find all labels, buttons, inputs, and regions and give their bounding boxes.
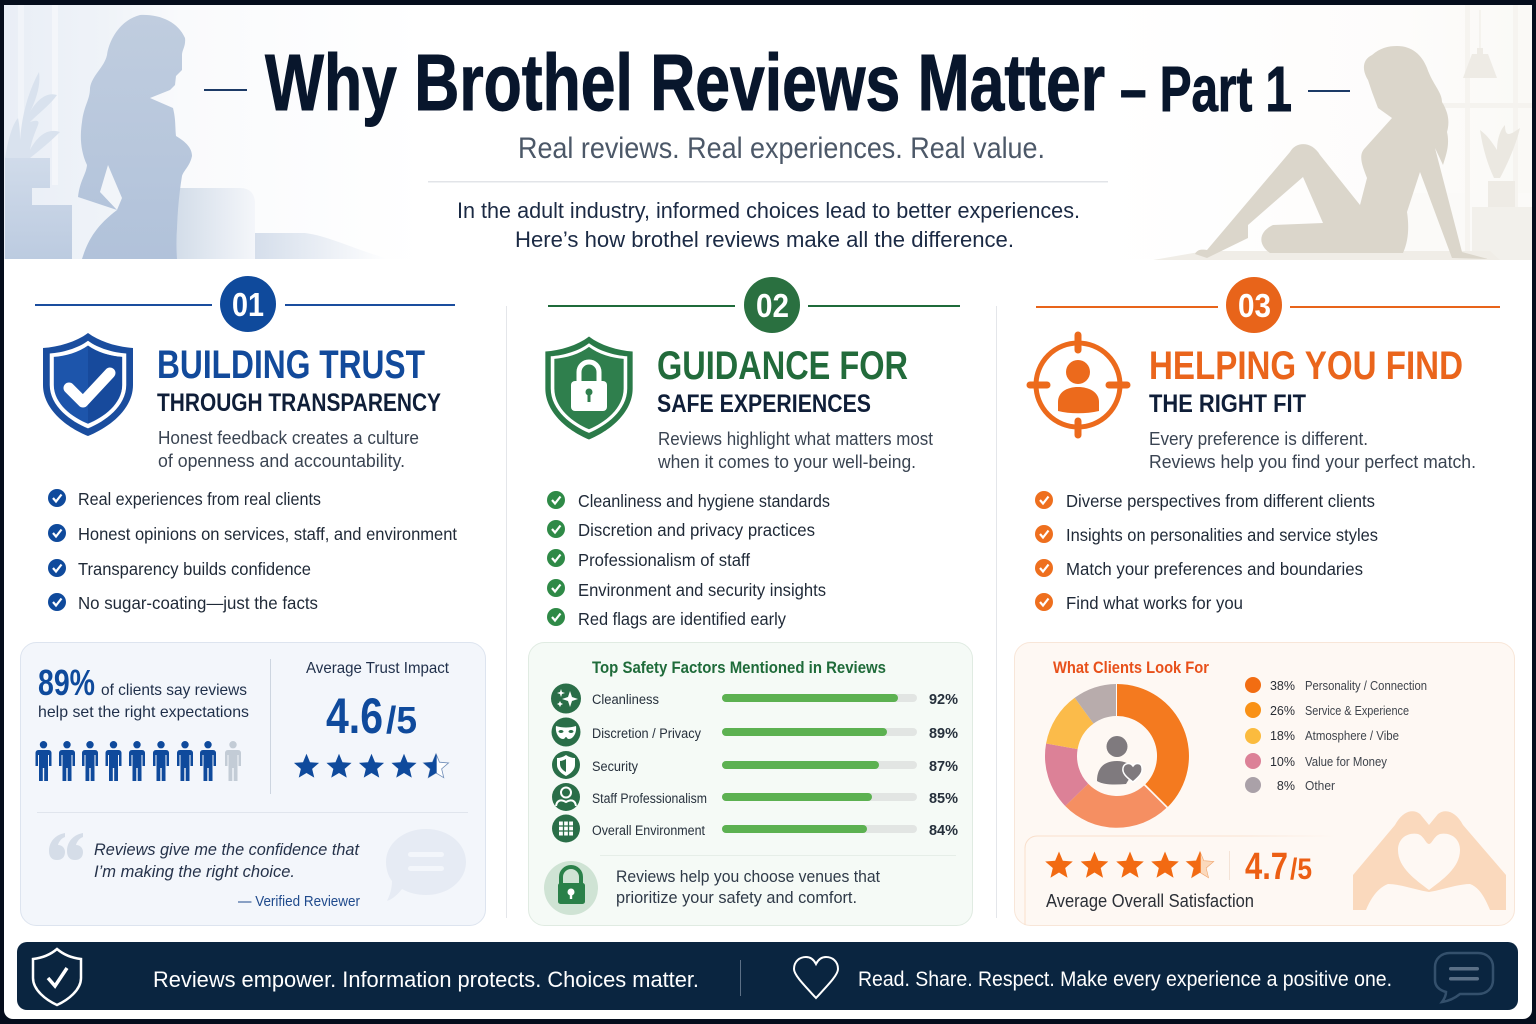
bullet list: Diverse perspectives from different clients — [1066, 491, 1375, 511]
description: Honest feedback creates a culture — [158, 428, 419, 448]
stat: average trust impact — [306, 660, 450, 744]
number badge 03 — [1226, 277, 1282, 333]
rating stars — [294, 754, 449, 778]
panel: what clients look for — [1014, 642, 1514, 926]
intro text: In the adult industry, informed choices lead to better experiences. — [457, 198, 1080, 223]
column separators — [506, 306, 507, 918]
number badge 01: 01 — [232, 286, 264, 323]
left room decor — [5, 5, 390, 259]
testimonial: Reviews give me the confidence that — [94, 840, 360, 859]
intro text: Here’s how brothel reviews make all the difference. — [515, 227, 1014, 252]
icon: shield with lock — [545, 336, 633, 440]
icon: speech bubble — [386, 829, 466, 901]
stat: 89 percent: of clients say reviews — [101, 682, 247, 699]
row: security — [552, 751, 958, 779]
icon: chat bubble outline — [1435, 953, 1493, 1002]
number badge 02: 02 — [756, 287, 789, 324]
bullet list: No sugar-coating—just the facts — [78, 593, 318, 613]
title part label: – Part 1 — [1120, 53, 1292, 125]
attribution: — Verified Reviewer — [238, 894, 360, 910]
right room decor — [1153, 5, 1532, 260]
section 02: guidance — [545, 277, 960, 629]
section 03: right fit — [1030, 277, 1500, 613]
legend: Other — [1305, 779, 1335, 793]
row: staff professionalism: Staff Professionalism — [592, 791, 707, 806]
testimonial — [94, 840, 360, 881]
description — [1149, 429, 1476, 472]
subheading: THE RIGHT FIT — [1149, 390, 1306, 418]
row: security: Security — [592, 759, 638, 774]
bottom banner — [17, 942, 1518, 1010]
header banner — [4, 5, 1532, 260]
legend: 8% — [1277, 779, 1295, 793]
row: overall environment: 84% — [929, 823, 958, 839]
legend: Service & Experience — [1305, 704, 1409, 718]
panel: trust stats — [20, 642, 486, 926]
heading: GUIDANCE FOR — [657, 344, 908, 388]
title rule right — [1308, 90, 1350, 92]
intro text — [457, 198, 1080, 252]
description: Every preference is different. — [1149, 429, 1368, 449]
legend: Value for Money — [1305, 755, 1388, 769]
stat: 89 percent — [38, 662, 249, 721]
stat: average trust impact: /5 — [386, 700, 417, 742]
row: cleanliness: 92% — [929, 692, 958, 708]
row: cleanliness: Cleanliness — [592, 692, 659, 707]
stat: 89 percent: 89% — [38, 662, 95, 703]
number badge 01 — [220, 276, 276, 332]
safety note: Reviews help you choose venues that — [616, 868, 880, 886]
icon: heart hands — [1353, 811, 1506, 910]
bullet list — [1035, 491, 1378, 613]
heading: BUILDING TRUST — [157, 343, 425, 387]
bullet list: Transparency builds confidence — [78, 559, 311, 579]
bullet list: Insights on personalities and service styles — [1066, 525, 1378, 545]
subtitle: Real reviews. Real experiences. Real value. — [518, 132, 1045, 165]
legend: 10% — [1270, 755, 1295, 769]
subheading: SAFE EXPERIENCES — [657, 390, 871, 418]
safety note: prioritize your safety and comfort. — [616, 889, 857, 907]
bullet list: Environment and security insights — [578, 580, 826, 600]
stat: average trust impact: 4.6 — [326, 688, 383, 744]
testimonial: I’m making the right choice. — [94, 862, 295, 881]
bullet list: Find what works for you — [1066, 593, 1243, 613]
donut chart — [1045, 684, 1189, 828]
panel: safety factors — [528, 642, 972, 926]
score: /5 — [1290, 853, 1312, 886]
number badge 03: 03 — [1238, 287, 1271, 324]
bullet list — [48, 489, 457, 613]
legend: 18% — [1270, 729, 1295, 743]
chart title: Top Safety Factors Mentioned in Reviews — [592, 659, 886, 677]
sub-panel: satisfaction rating — [1025, 836, 1335, 925]
row: security: 87% — [929, 759, 958, 775]
icon: heart outline — [794, 957, 838, 998]
bullet list: Red flags are identified early — [578, 609, 786, 629]
icon: person with heart — [1097, 736, 1142, 785]
bullet list — [547, 491, 830, 629]
bullet list: Discretion and privacy practices — [578, 520, 815, 540]
description: Reviews help you find your perfect match. — [1149, 452, 1476, 472]
right figure silhouette — [1195, 46, 1488, 259]
heading: HELPING YOU FIND — [1149, 344, 1463, 388]
title rule left — [204, 89, 247, 91]
row: overall environment: Overall Environment — [592, 823, 705, 838]
description: Reviews highlight what matters most — [658, 429, 933, 449]
score label: Average Overall Satisfaction — [1046, 891, 1254, 911]
safety note — [616, 868, 880, 907]
section 01: building trust — [35, 276, 457, 613]
bullet list: Professionalism of staff — [578, 550, 750, 570]
row: discretion: 89% — [929, 726, 958, 742]
icon row: people 8 of 9 — [36, 741, 241, 781]
bullet list: Honest opinions on services, staff, and environment — [78, 524, 457, 544]
header divider — [428, 181, 1108, 182]
title: Why Brothel Reviews Matter — [265, 38, 1105, 127]
description — [657, 429, 933, 472]
bullet list: Cleanliness and hygiene standards — [578, 491, 830, 511]
banner message left: Reviews empower. Information protects. Choices matter. — [153, 967, 699, 992]
row: discretion: Discretion / Privacy — [592, 726, 701, 741]
stat: 89 percent: help set the right expectations — [38, 704, 249, 721]
row: cleanliness — [551, 684, 958, 714]
legend: 26% — [1270, 704, 1295, 718]
icon: shield check outline — [33, 949, 81, 1005]
subheading: THROUGH TRANSPARENCY — [157, 389, 441, 417]
description — [158, 428, 419, 471]
row: staff professionalism — [552, 783, 958, 811]
description: when it comes to your well-being. — [657, 452, 916, 472]
stat: average trust impact: Average Trust Impact — [306, 660, 450, 677]
row: staff professionalism: 85% — [929, 791, 958, 807]
row: overall environment — [552, 814, 958, 842]
quote mark — [49, 833, 83, 860]
row: discretion — [552, 718, 958, 746]
legend — [1245, 677, 1427, 793]
legend: Atmosphere / Vibe — [1305, 729, 1399, 743]
description: of openness and accountability. — [158, 451, 405, 471]
legend: Personality / Connection — [1305, 679, 1427, 693]
number badge 02 — [744, 277, 800, 333]
bullet list: Match your preferences and boundaries — [1066, 559, 1363, 579]
banner message right: Read. Share. Respect. Make every experience a positive one. — [858, 968, 1392, 991]
left figure silhouette — [78, 15, 192, 259]
rating stars — [1045, 852, 1214, 878]
score: 4.7 — [1245, 846, 1288, 888]
bullet list: Real experiences from real clients — [78, 489, 321, 509]
icon: target with person — [1030, 335, 1127, 435]
legend: 38% — [1270, 679, 1295, 693]
icon: lock — [544, 861, 598, 915]
icon: shield with check — [43, 333, 133, 436]
chart title: What Clients Look For — [1053, 659, 1210, 677]
